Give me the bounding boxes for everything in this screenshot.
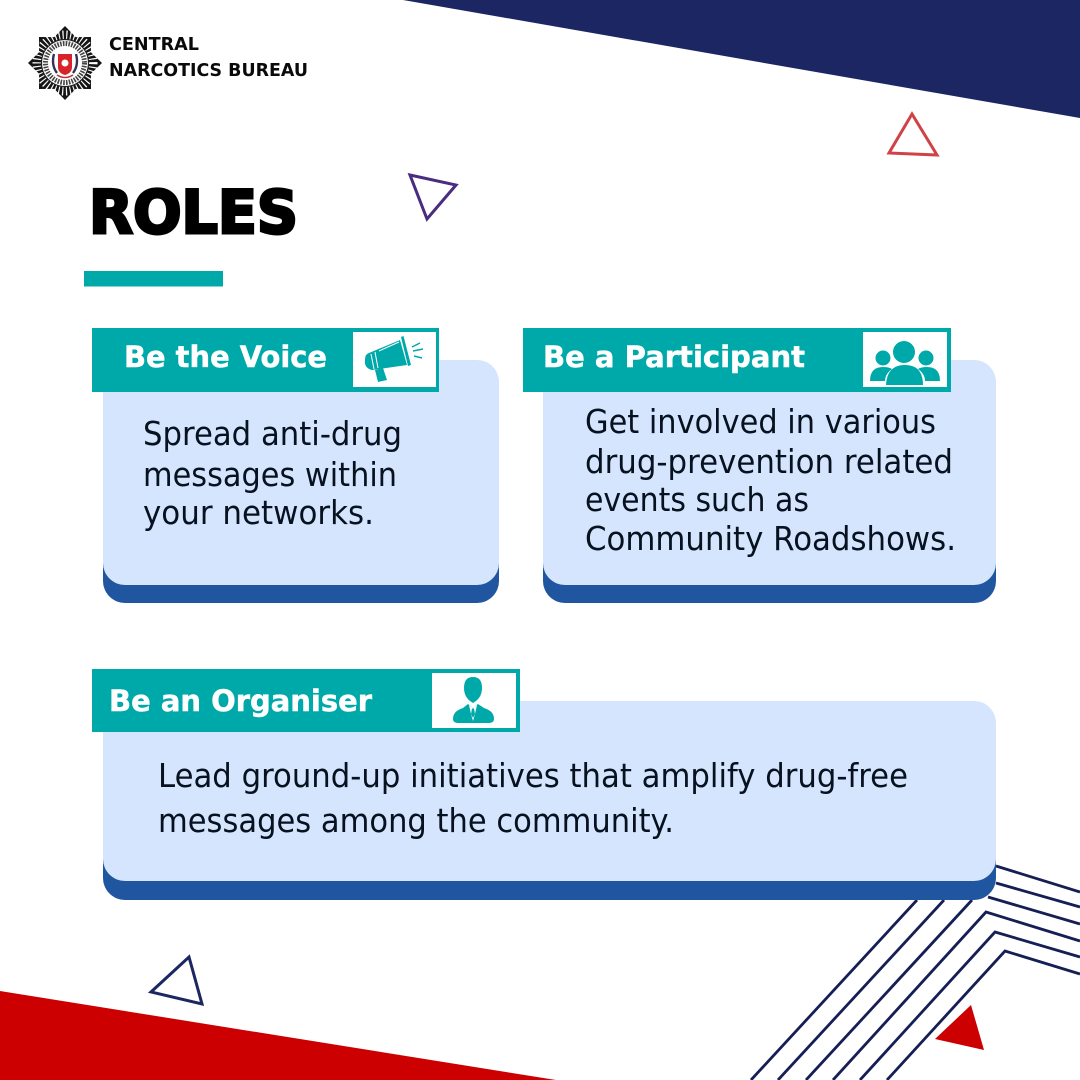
text: Be a Participant body: drug-prevention related (585, 442, 953, 481)
banner: Be the Voice: Be the Voice (124, 340, 327, 374)
icon: red outline triangle (889, 114, 937, 155)
title: ROLES (89, 178, 298, 248)
text: Be the Voice body: Spread anti-drug (143, 414, 402, 453)
banner: Be the Voice (92, 328, 439, 392)
text: Be an Organiser body: Lead ground-up initiatives that amplify drug-free (158, 756, 908, 795)
text: Be the Voice body (143, 414, 402, 532)
text: Be a Participant body: Community Roadshows. (585, 519, 956, 558)
banner: Be a Participant: Be a Participant (543, 340, 805, 374)
title underline bar (84, 271, 223, 286)
banner: Be an Organiser: Be an Organiser (109, 684, 373, 718)
text: Be a Participant body: Get involved in various (585, 402, 936, 441)
icon: navy outline triangle (151, 957, 202, 1004)
icon: red filled triangle (935, 1005, 984, 1050)
banner: Be an Organiser (92, 669, 520, 732)
icon: purple outline triangle (410, 175, 456, 219)
text: Be a Participant body: events such as (585, 480, 809, 519)
panel: Be a Participant (523, 328, 996, 603)
red corner banner (0, 991, 556, 1080)
diagonal line pattern (751, 866, 1080, 1080)
brand name: CENTRAL (109, 34, 199, 55)
text: Be an Organiser body: messages among the community. (158, 801, 674, 840)
icon: megaphone (365, 336, 423, 382)
brand name (109, 34, 308, 81)
text: Be a Participant body (585, 402, 956, 558)
panel: Be the Voice (92, 328, 499, 603)
brand name: NARCOTICS BUREAU (109, 60, 308, 81)
logo: Central Narcotics Bureau badge (28, 26, 102, 100)
panel: Be an Organiser (92, 669, 996, 900)
icon: group of people (870, 341, 940, 385)
text: Be the Voice body: your networks. (143, 493, 374, 532)
text: Be the Voice body: messages within (143, 455, 397, 494)
banner: Be a Participant (523, 328, 951, 392)
navy corner banner (403, 0, 1080, 118)
text: Be an Organiser body (158, 756, 908, 840)
icon: businessman (453, 677, 494, 723)
